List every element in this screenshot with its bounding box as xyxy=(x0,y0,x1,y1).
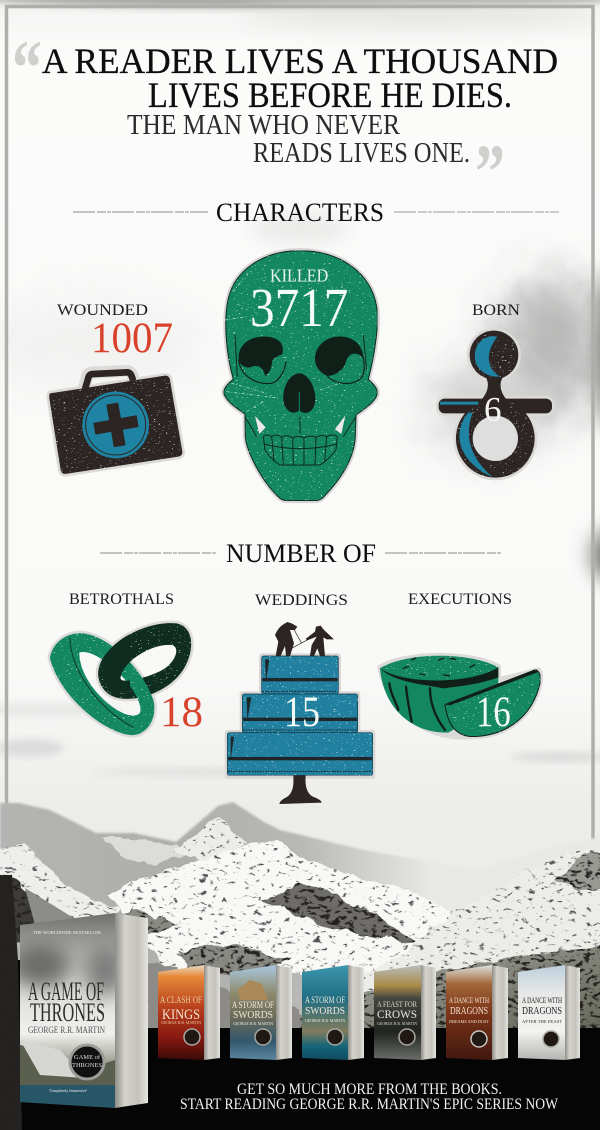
book: A Game of Thrones: A GAME OF xyxy=(28,977,104,1006)
book: A Game of Thrones: THRONES xyxy=(30,998,105,1027)
opening quotation mark: “ xyxy=(12,24,42,111)
call to action xyxy=(180,1081,558,1113)
wounded count: 1007 xyxy=(91,315,173,362)
executions count: 16 xyxy=(476,689,511,736)
heading: characters: CHARACTERS xyxy=(216,197,384,227)
book: A Game of Thrones: 'Completely Immersive' xyxy=(49,1088,87,1093)
executions label: EXECUTIONS xyxy=(408,591,512,608)
book: A Storm of Swords II: A STORM OF xyxy=(305,995,345,1005)
closing quotation mark: ” xyxy=(475,128,505,215)
killed count: 3717 xyxy=(250,277,348,338)
icon: pacifier xyxy=(439,331,552,478)
book: A Clash of Kings: KINGS xyxy=(162,1007,200,1023)
panel: weddings xyxy=(227,592,373,804)
panel: wounded xyxy=(49,302,182,474)
book: A Feast for Crows xyxy=(374,965,436,1060)
book: A Game of Thrones xyxy=(10,913,148,1110)
book: A Storm of Swords II: GEORGE R.R. MARTIN xyxy=(305,1018,345,1023)
right eye socket xyxy=(315,337,364,383)
book: A Storm of Swords II: SWORDS xyxy=(305,1005,345,1017)
book: A Game of Thrones: GEORGE R.R. MARTIN xyxy=(28,1026,105,1036)
call to action line 1: GET SO MUCH MORE FROM THE BOOKS. xyxy=(237,1081,502,1098)
decorative frame xyxy=(6,6,593,850)
betrothals count: 18 xyxy=(160,689,203,736)
book: A Storm of Swords I: GEORGE R.R. MARTIN xyxy=(233,1021,273,1026)
book: A Dance with Dragons I: A DANCE WITH xyxy=(449,996,489,1005)
weddings count: 15 xyxy=(284,689,320,736)
nose cavity xyxy=(283,373,315,413)
panel: betrothals xyxy=(50,591,203,736)
book: A Feast for Crows: A FEAST FOR xyxy=(377,1000,418,1009)
born label: BORN xyxy=(472,302,520,319)
book: A Clash of Kings xyxy=(158,965,220,1060)
book: A Dance with Dragons I: DRAGONS xyxy=(450,1006,488,1017)
cake tiers xyxy=(227,656,373,775)
quote line 1: A READER LIVES A THOUSAND xyxy=(42,41,558,81)
cake topper: two duelling figures xyxy=(275,622,334,656)
icon: skull xyxy=(224,251,377,501)
book: A Dance with Dragons I: DREAMS AND DUST xyxy=(449,1019,489,1024)
weddings label: WEDDINGS xyxy=(255,592,348,609)
cake bands xyxy=(228,659,372,760)
panel: killed skull xyxy=(224,251,377,501)
book: A Feast for Crows: CROWS xyxy=(377,1007,417,1021)
book: A Dance with Dragons II: DRAGONS xyxy=(522,1006,562,1017)
heading: number of: NUMBER OF xyxy=(226,538,376,568)
panel: born xyxy=(439,302,552,478)
icon: medical kit xyxy=(49,371,182,474)
background: snowy mountains xyxy=(0,802,600,1130)
panel: executions xyxy=(380,591,541,737)
quote line 2: LIVES BEFORE HE DIES. xyxy=(148,75,512,115)
icon: watermelon xyxy=(380,655,541,737)
book: A Dance with Dragons II: AFTER THE FEAST xyxy=(522,1019,562,1024)
betrothals label: BETROTHALS xyxy=(69,591,174,608)
book: A Storm of Swords I: A STORM OF xyxy=(232,1000,274,1010)
skull scratches xyxy=(225,278,340,412)
book: A Game of Thrones: GAME of xyxy=(74,1054,101,1061)
quote line 3: THE MAN WHO NEVER xyxy=(127,110,400,141)
cake stand xyxy=(279,775,322,804)
pacifier highlights xyxy=(440,336,500,477)
book: A Clash of Kings: GEORGE R.R. MARTIN xyxy=(161,1020,201,1025)
cheek gaps xyxy=(255,415,345,434)
teeth xyxy=(235,335,367,465)
born count: 6 xyxy=(484,390,501,429)
quote block xyxy=(12,24,558,215)
left eye socket xyxy=(239,337,286,384)
book: A Game of Thrones: THRONES xyxy=(72,1062,102,1069)
book: A Game of Thrones: THE WORLDWIDE BESTSELLER xyxy=(33,930,101,935)
book: A Dance with Dragons II: A DANCE WITH xyxy=(522,996,562,1005)
book: A Dance with Dragons I xyxy=(446,965,508,1060)
call to action line 2: START READING GEORGE R.R. MARTIN'S EPIC SERIES NOW xyxy=(180,1096,558,1113)
wounded label: WOUNDED xyxy=(57,302,148,319)
killed label: KILLED xyxy=(270,265,328,285)
book: A Clash of Kings: A CLASH OF xyxy=(160,995,202,1005)
book: A Storm of Swords I xyxy=(230,965,292,1060)
icon: wedding cake xyxy=(227,622,373,804)
book: A Storm of Swords I: SWORDS xyxy=(233,1009,273,1021)
quote line 4: READS LIVES ONE. xyxy=(253,138,470,169)
book: A Dance with Dragons II xyxy=(518,965,580,1060)
icon: interlocked rings xyxy=(50,623,191,735)
book: A Feast for Crows: GEORGE R.R. MARTIN xyxy=(377,1021,417,1026)
book: A Storm of Swords II xyxy=(302,965,364,1060)
